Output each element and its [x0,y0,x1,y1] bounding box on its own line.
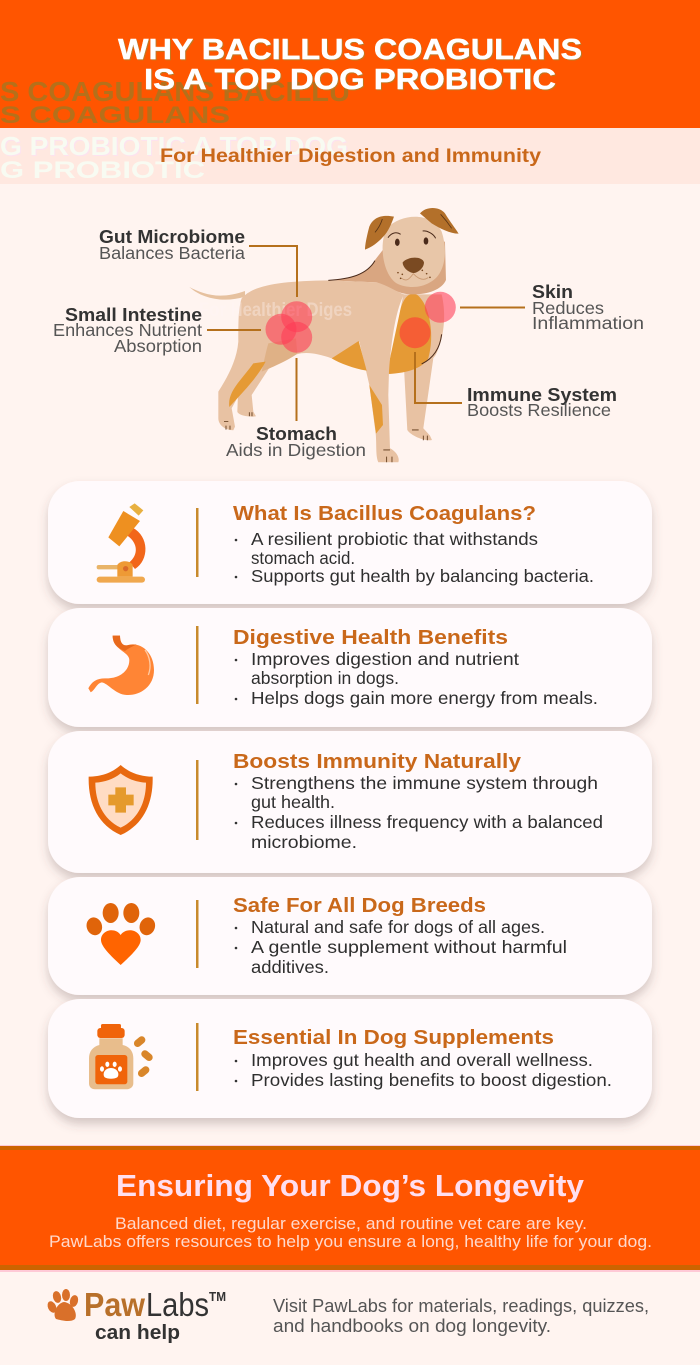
bullet text: A resilient probiotic that withstands [251,529,538,549]
footer text: Visit PawLabs for materials, readings, quizzes, [273,1296,649,1316]
subtitle strip: G PROBIOTIC [0,157,205,184]
label: stomach: Aids in Digestion [226,440,366,460]
title: WHY BACILLUS COAGULANS [118,34,582,66]
icon: logo paw [46,1289,79,1321]
bullet text [235,1050,612,1090]
bullet text: Strengthens the immune system through [251,773,598,793]
header band: S COAGULANS [0,102,230,129]
card: what is bacillus coagulans [48,481,652,604]
bullet text: Improves gut health and overall wellness. [251,1050,593,1070]
divider [196,900,198,968]
bullet text: Supports gut health by balancing bacteria. [251,566,594,586]
marker: small intestine [266,314,296,345]
label: small intestine [53,304,202,356]
label: immune system [467,384,617,420]
marker: stomach [281,322,312,353]
logo: PawLabs can help: can help [95,1322,180,1344]
bullet text: A gentle supplement without harmful [251,937,567,957]
banner heading: Ensuring Your Dog’s Longevity [116,1168,585,1203]
longevity banner [0,1145,700,1272]
bullet text: Helps dogs gain more energy from meals. [251,688,598,708]
subtitle strip [0,128,700,184]
label: immune system: Immune System [467,384,617,405]
divider [196,626,198,704]
label: stomach: Stomach [256,423,337,444]
heading: Boosts Immunity Naturally [233,750,522,773]
label: gut microbiome [99,226,245,263]
label: skin: Skin [532,281,573,302]
icon: paw with heart [84,903,157,965]
ghost text overlay: For Healthier Diges [199,300,352,321]
bullet text: gut health. [251,792,335,812]
label: immune system: Boosts Resilience [467,400,611,420]
logo: PawLabs can help: Labs [146,1286,209,1323]
heading: Safe For All Dog Breeds [233,894,486,917]
bullet text: Improves digestion and nutrient [251,649,519,669]
label: skin: Reduces [532,298,604,318]
icon: stomach [88,636,154,695]
bullet text: Reduces illness frequency with a balanced [251,812,603,832]
banner text [49,1215,652,1251]
banner text: PawLabs offers resources to help you ensure a long, healthy life for your dog. [49,1233,652,1251]
subtitle strip: G PROBIOTIC A TOP DOG [1,132,349,162]
bullet text [235,649,598,708]
label: small intestine: Enhances Nutrient [53,320,202,340]
label: stomach [226,423,366,460]
title: IS A TOP DOG PROBIOTIC [144,64,556,96]
icon: supplement bottle [89,1024,154,1089]
icon: shield [89,765,153,835]
heading: Digestive Health Benefits [233,626,508,649]
label: gut microbiome: Balances Bacteria [99,243,245,263]
leader lines [207,246,525,421]
footer text [273,1296,649,1336]
divider [196,508,198,577]
bullet text: additives. [251,957,329,977]
divider [196,760,198,840]
divider [196,1023,198,1091]
card: digestive health benefits [48,608,652,727]
icon: microscope [97,503,145,583]
heading: Essential In Dog Supplements [233,1026,554,1049]
bullet text [235,917,567,977]
label: skin: Inflammation [532,313,644,333]
marker: gut microbiome [281,301,312,332]
title [118,34,582,96]
label: skin [532,281,644,333]
bullet text: Natural and safe for dogs of all ages. [251,917,545,937]
subtitle strip: For Healthier Digestion and Immunity [160,146,541,167]
bullet text [235,773,603,852]
illustration: dog [189,208,459,462]
bullet text: Provides lasting benefits to boost digestion. [251,1070,612,1090]
footer text: and handbooks on dog longevity. [273,1316,551,1336]
dog anatomy diagram [53,208,644,462]
logo: PawLabs can help: Paw [84,1286,145,1323]
logo: PawLabs can help [46,1286,226,1344]
subtitle strip: G PROBIOTIC A TOP DOG [0,131,348,161]
card: boosts immunity naturally [48,731,652,873]
heading: What Is Bacillus Coagulans? [233,502,536,525]
label: small intestine: Absorption [114,336,202,356]
bullet text: microbiome. [251,832,357,852]
bullet text [235,529,594,586]
label: gut microbiome: Gut Microbiome [99,226,245,247]
header band [0,0,700,129]
card: safe for all dog breeds [48,877,652,995]
marker: immune system [400,317,430,348]
bullet text: stomach acid. [251,548,355,568]
label: small intestine: Small Intestine [65,304,202,325]
marker: skin [425,292,456,323]
banner text: Balanced diet, regular exercise, and routine vet care are key. [115,1215,587,1233]
logo: PawLabs can help: TM [209,1289,226,1304]
header band: S COAGULANS BACILLU [0,76,350,107]
card: essential in dog supplements [48,999,652,1118]
bullet text: absorption in dogs. [251,668,399,688]
